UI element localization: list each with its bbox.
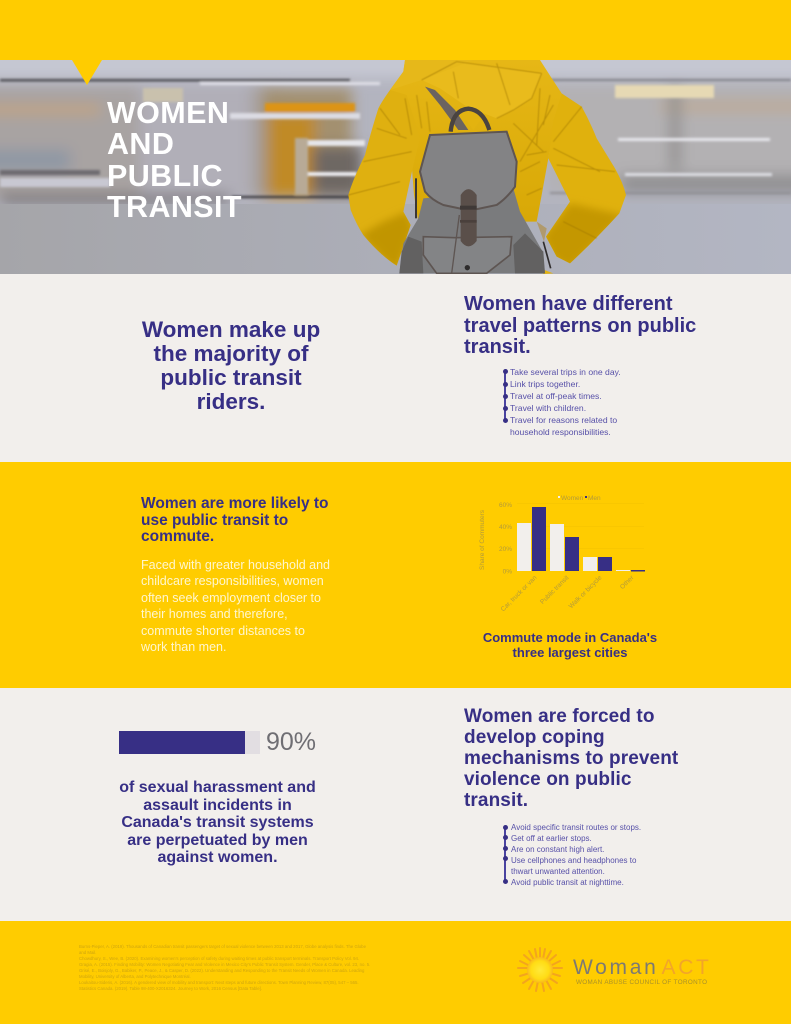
legend [558,495,601,502]
axis labels: 0% [503,568,512,576]
text block: commute explanation: Faced with greater household and [141,558,330,572]
category labels: Car, truck or van [500,574,539,613]
title: AND [107,127,174,161]
heading: travel patterns: travel patterns on public [464,314,696,336]
text block: harassment statistic: of sexual harassment and [119,779,316,796]
list: coping mechanisms: thwart unwanted attention. [511,866,605,876]
heading: majority statement: riders. [197,389,265,414]
hero photo: commuter in yellow jacket with backpack [0,60,791,274]
references: Gragia, A. (2015). Finding Mobility: Women Negotiating Fear and Violence in Mexico City's Public Transit System. Gender, Place & Culture, vol. 23, no. 5. [79,962,370,966]
list: coping mechanisms: Avoid specific transit routes or stops. [511,822,641,832]
axis labels: 40% [499,524,512,531]
axis labels: 20% [499,546,512,553]
heading: travel patterns: Women have different [464,293,673,315]
legend: Women [561,495,584,502]
list: travel patterns: Travel at off-peak times. [510,391,602,401]
text block: commute explanation: often seek employment closer to [141,591,321,605]
heading: coping mechanisms: transit. [464,790,528,810]
title: WOMEN [107,96,229,130]
references: and Mail. [79,950,96,954]
legend: Men [588,495,601,502]
text block: commute explanation: childcare responsibilities, women [141,574,324,588]
axis labels: Share of Commuters [479,509,486,570]
text block: harassment statistic: are perpetuated by men [127,832,308,848]
person (drawn in 3x crop coordinates) [348,60,626,274]
logo tagline: WOMAN ABUSE COUNCIL OF TORONTO [576,979,707,986]
list: coping mechanisms: Avoid public transit at nighttime. [511,878,624,886]
panel: commuting [0,462,791,688]
text block: harassment statistic: Canada's transit systems [121,814,314,831]
blurred train background [0,50,791,274]
yellow jacket [348,60,626,274]
list: coping mechanisms [503,822,641,886]
chart caption [483,630,657,660]
category labels: Walk or bicycle [568,574,604,610]
panel: harassment and coping [0,688,791,921]
references: Loukaitou-Sideris, A. (2016). A gendered view of mobility and transport: Next steps and future directions. Town Planning Review, 87(05), 547 – 565. [79,980,359,984]
category labels [500,574,636,613]
logo wordmark: WomanACT [573,956,712,979]
references: Grisé, E., Boisjoly, G., Babiker, P., Peace, J., & Casper, D. (2022). Understanding and Responding to the Transit Needs of Women in Canada. Leading [79,968,364,972]
yellow notch pointer [72,60,102,85]
text block: commute explanation [141,558,330,654]
heading: coping mechanisms [464,706,678,810]
heading: coping mechanisms: Women are forced to [464,706,655,726]
icon: sun [517,947,563,992]
axis labels [479,502,512,576]
title: TRANSIT [107,190,242,224]
text block: commute explanation: work than men. [141,640,226,654]
heading: majority statement: Women make up [142,317,320,342]
heading: commute likelihood: Women are more likely to [141,495,328,512]
text block: harassment statistic: assault incidents in [143,796,292,814]
text block: harassment statistic [119,779,316,866]
axis labels: 60% [499,502,512,509]
chart caption: Commute mode in Canada's [483,630,657,645]
heading: travel patterns: transit. [464,336,531,358]
text block: harassment statistic: against women. [157,849,278,866]
heading: majority statement: the majority of [153,341,309,366]
heading: coping mechanisms: violence on public [464,768,632,790]
panel: footer [0,921,791,1024]
references [79,944,370,991]
heading: coping mechanisms: develop coping [464,726,605,748]
references: Statistics Canada. (2019). Table 98-400-X2016324. Journey to Work, 2016 Census [Data Table]. [79,986,262,990]
chart caption: three largest cities [513,644,627,660]
list: coping mechanisms: Are on constant high alert. [511,844,604,854]
category labels: Other [619,574,636,591]
panel: majority of riders [0,274,791,462]
heading: commute likelihood: commute. [141,528,214,545]
list: travel patterns: Take several trips in one day. [510,367,621,377]
heading: majority statement: public transit [160,365,302,390]
bars [517,503,645,572]
heading: commute likelihood: use public transit to [141,512,288,528]
list: coping mechanisms: Get off at earlier stops. [511,834,592,842]
title [107,96,242,224]
list: travel patterns: Travel with children. [510,403,586,413]
text block: commute explanation: their homes and therefore, [141,607,288,621]
text block: commute explanation: commute shorter distances to [141,624,305,638]
heading: commute likelihood [141,495,328,545]
top yellow band [0,0,791,60]
references: Burns-Pieper, A. (2019). Thousands of Canadian transit passengers target of sexual violence between 2013 and 2017, Globe analysis finds. The Globe [79,944,366,948]
list: coping mechanisms: Use cellphones and headphones to [511,856,636,864]
logo: WomanACT [517,947,712,992]
list: travel patterns: household responsibilities. [510,427,611,437]
heading: majority statement [142,317,320,414]
heading: travel patterns [464,293,696,358]
title: PUBLIC [107,159,223,193]
bar chart: commute mode [479,495,645,613]
list: travel patterns [503,367,621,437]
category labels: Public transit [539,574,571,606]
progress bar: 90 percent [119,731,260,754]
list: travel patterns: Link trips together. [510,379,580,389]
backpack [399,87,551,273]
heading: coping mechanisms: mechanisms to prevent [464,748,678,768]
list: travel patterns: Travel for reasons related to [510,415,617,425]
references: Mobility, University of Alberta, and Polytechnique Montréal. [79,974,191,978]
references: Chowdhury, S., Wee, B. (2020). Examining women's perception of safety during waiting times at public transport terminals. Transport Policy Vol. 94. [79,956,359,960]
stat: 90 percent: 90% [266,728,316,756]
